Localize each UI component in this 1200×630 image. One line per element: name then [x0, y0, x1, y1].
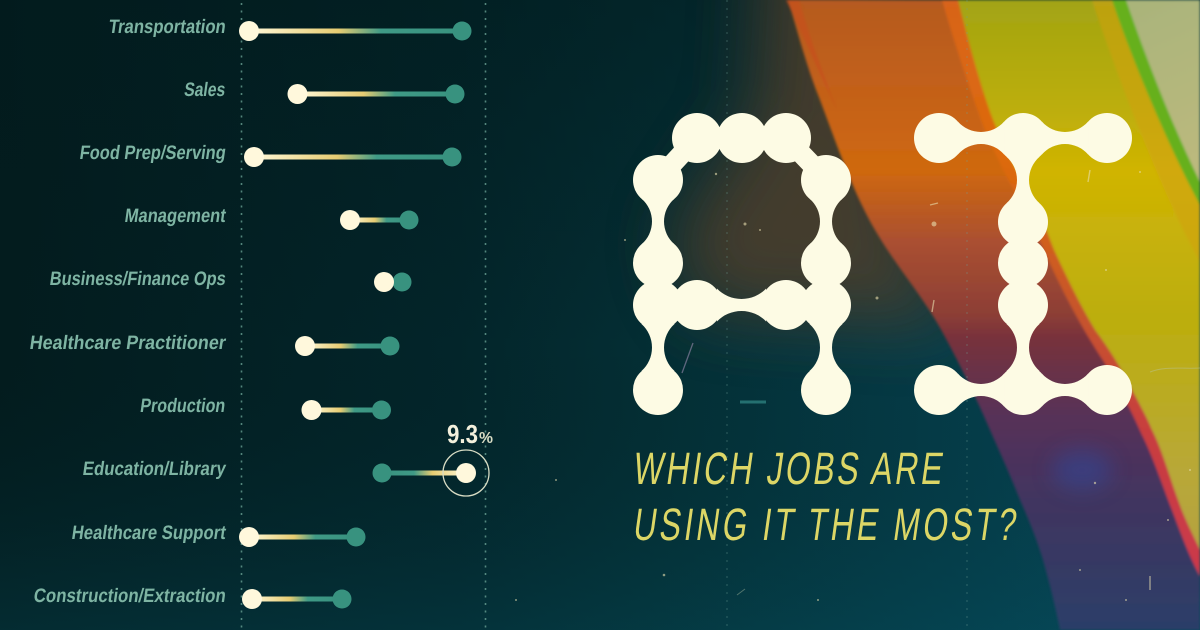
row: Construction/Extraction [32, 585, 351, 609]
title: AI in connected-dot lettering [633, 113, 1132, 415]
callout ring [443, 450, 489, 496]
band: orange left rim [786, 0, 838, 112]
row: Business/Finance Ops: Business/Finance Ops [48, 268, 227, 290]
row: Healthcare Support [70, 522, 365, 547]
subtitle line 2: USING IT THE MOST? [631, 500, 1020, 550]
row: Production: Production [139, 395, 227, 417]
row: Healthcare Support: Healthcare Support [70, 522, 228, 544]
letter A [633, 113, 851, 415]
band: orange to purple [788, 0, 1200, 630]
band: beige corner [1105, 0, 1200, 215]
row: Healthcare Practitioner: Healthcare Practitioner [28, 332, 228, 354]
subtitle [631, 444, 1020, 550]
subtitle line 1: WHICH JOBS ARE [631, 444, 946, 494]
chart: dumbbell chart of job categories [28, 3, 493, 630]
row: Healthcare Practitioner [28, 332, 399, 356]
band: blue glow [1052, 450, 1112, 490]
row: Transportation [107, 16, 471, 41]
row: Education/Library with callout: Education/Library [81, 458, 227, 480]
row: Business/Finance Ops [48, 268, 411, 292]
specks [515, 138, 1200, 601]
row: Education/Library with callout [81, 419, 493, 496]
row: Sales [183, 79, 465, 104]
band: bright right rim [942, 0, 1200, 576]
band: amber strip beside green [1092, 0, 1200, 262]
band: yellow [930, 0, 1200, 600]
row: Management: Management [123, 205, 228, 227]
panel: rainbow bands [786, 0, 1200, 630]
row: Management [123, 205, 418, 230]
row: Food Prep/Serving: Food Prep/Serving [78, 142, 227, 164]
row: Sales: Sales [183, 79, 227, 101]
band: green strip [1112, 0, 1200, 205]
row: Production [139, 395, 391, 420]
chart axis guides [242, 3, 486, 630]
callout value: % [479, 430, 493, 447]
decorative dotted guides, right side [727, 0, 967, 630]
letter I [914, 113, 1132, 415]
callout value: 9.3 [447, 419, 478, 449]
row: Food Prep/Serving [78, 142, 461, 167]
row: Transportation: Transportation [107, 16, 227, 38]
row: Construction/Extraction: Construction/Extraction [32, 585, 227, 607]
